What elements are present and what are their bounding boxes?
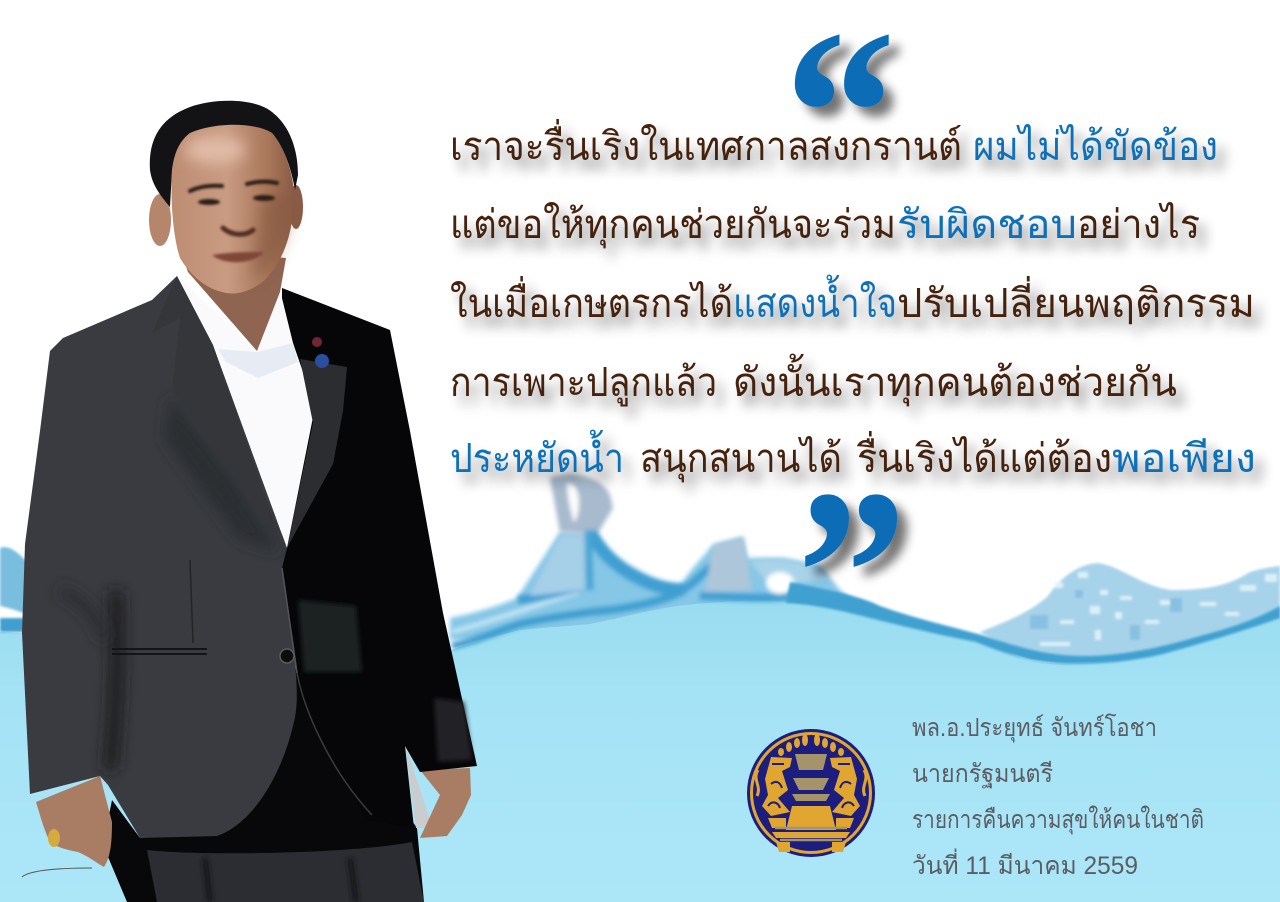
footer attribution text: นายกรัฐมนตรี — [912, 760, 1053, 788]
line 3: ในเมื่อเกษตรกรได้ — [450, 276, 733, 326]
small crest — [705, 537, 752, 592]
shirt shade — [218, 343, 298, 378]
line 2: อย่างไร — [1077, 202, 1200, 247]
face features — [190, 182, 277, 262]
pale stripe — [452, 592, 578, 632]
eyes — [198, 199, 220, 205]
splash column — [550, 474, 613, 535]
ground scribble — [22, 868, 92, 877]
left water edge — [0, 547, 30, 632]
person: prime minister in dark suit — [22, 101, 477, 902]
neck — [180, 250, 286, 351]
shirt — [177, 276, 315, 548]
ring — [48, 829, 60, 847]
line 5: รื่นเริงได้แต่ต้อง — [857, 431, 1112, 481]
footer attribution text — [912, 713, 1204, 880]
sleeve cuff highlight — [434, 698, 472, 762]
line 5: สนุกสนานได้ — [640, 436, 842, 483]
cheek shadow — [252, 190, 292, 282]
lapel pin blue — [315, 354, 329, 368]
jacket pocket — [112, 649, 207, 654]
torso shade patch — [298, 600, 362, 672]
upper left band — [518, 586, 584, 600]
right hand — [420, 768, 471, 838]
dark band right — [786, 582, 1280, 664]
jacket hem line — [297, 673, 372, 815]
line 1: เราจะรื่นเริงในเทศกาลสงกรานต์ — [450, 119, 962, 169]
line 1 — [450, 119, 1218, 169]
line 1: ผมไม่ได้ขัดข้อง — [973, 124, 1218, 169]
trousers — [103, 660, 424, 902]
line 3: แสดงน้ำใจ — [733, 274, 897, 326]
water band — [452, 474, 830, 646]
line 4 — [450, 353, 1177, 407]
crest blue base — [700, 596, 790, 598]
left lapel — [152, 276, 284, 552]
quotation text — [450, 119, 1256, 483]
trouser leg — [147, 842, 424, 902]
band middle — [590, 566, 712, 612]
ear left — [149, 194, 171, 246]
crest speckle — [1040, 572, 1277, 646]
mouth — [212, 252, 264, 262]
lower left band — [452, 612, 590, 646]
splash highlight — [567, 484, 579, 522]
eyebrows — [190, 182, 277, 191]
foam bubble — [766, 572, 794, 594]
footer attribution text: พล.อ.ประยุทธ์ จันทร์โอชา — [912, 713, 1157, 743]
line 2 — [450, 201, 1200, 249]
line 5: พอเพียง — [1112, 437, 1256, 481]
ear right — [289, 185, 303, 229]
nose — [223, 228, 253, 234]
water splash flank — [450, 532, 900, 640]
left hand — [36, 776, 112, 867]
water crest right — [980, 563, 1280, 660]
hair — [150, 101, 298, 207]
footer attribution text: วันที่ 11 มีนาคม 2559 — [912, 848, 1138, 880]
line 4: การเพาะปลูกแล้ว — [450, 361, 717, 406]
dart — [190, 560, 193, 643]
lapel shadow — [165, 395, 280, 552]
emblem: office of the prime minister seal — [747, 729, 875, 857]
arm gap shade — [110, 590, 117, 770]
line 3: ปรับเปลี่ยนพฤติกรรม — [897, 276, 1255, 326]
splash vertical — [588, 530, 590, 590]
quote mark close: ” — [797, 440, 907, 706]
arm fold shade — [60, 590, 105, 640]
face — [171, 124, 294, 293]
trouser crease — [205, 858, 356, 902]
crest shade — [1030, 590, 1182, 640]
lapel edge line — [282, 568, 297, 673]
emblem ornaments — [756, 734, 866, 852]
line 3 — [450, 274, 1255, 326]
jacket button — [280, 649, 294, 663]
footer attribution text: รายการคืนความสุขให้คนในชาติ — [912, 805, 1204, 835]
right lapel — [287, 359, 347, 548]
forehead highlight — [185, 136, 245, 164]
water body — [0, 601, 1280, 902]
jacket black side — [282, 288, 477, 828]
line 5 — [450, 429, 1256, 483]
line 2: รับผิดชอบ — [897, 203, 1077, 247]
line 2: แต่ขอให้ทุกคนช่วยกันจะร่วม — [450, 201, 896, 249]
lapel pin red — [312, 337, 322, 347]
pale splash side — [530, 535, 584, 596]
line 4: ดังนั้นเราทุกคนต้องช่วยกัน — [733, 353, 1177, 407]
splash blue ribbon — [590, 532, 684, 590]
jacket grey front — [22, 276, 297, 838]
pale crest beyond — [750, 559, 830, 583]
line 5: ประหยัดน้ำ — [450, 429, 624, 481]
grey book behind hand — [405, 744, 433, 828]
